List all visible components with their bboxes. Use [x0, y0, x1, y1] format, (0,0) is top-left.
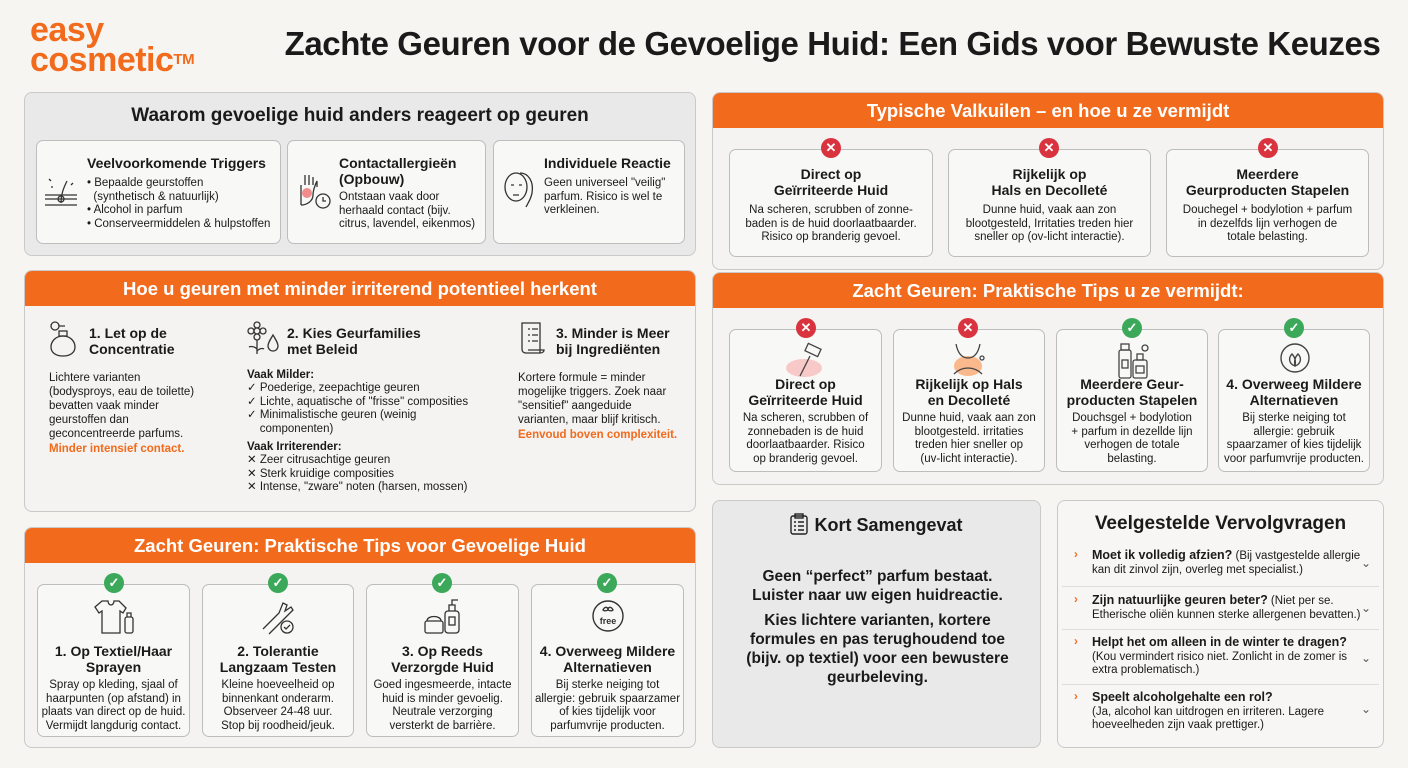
card 1: doorlaatbaarder. Risico	[746, 439, 865, 451]
panel: pitfalls: ✕	[1263, 140, 1273, 155]
faq 2: ⌄	[1361, 601, 1371, 615]
panel: pitfalls	[712, 92, 1384, 270]
faq 3	[1074, 635, 1371, 676]
card 2: en Decolleté	[928, 392, 1010, 408]
card 3: huid is minder gevoelig.	[382, 692, 503, 704]
panel: recognize scents: Concentratie	[89, 341, 175, 357]
card: individual reaction: parfum. Risico is wel te	[544, 190, 662, 202]
panel: recognize scents: ✕ Zeer citrusachtige geuren	[247, 454, 390, 466]
card: individual reaction	[493, 140, 685, 244]
faq 2: ›	[1074, 594, 1078, 606]
faq 4: ›	[1074, 691, 1078, 703]
check badges: ✓	[109, 575, 119, 590]
panel: recognize scents: mogelijke triggers. Zoek naar	[518, 386, 666, 398]
card: triggers	[36, 140, 281, 244]
card 1: 1. Op Textiel/Haar	[55, 643, 172, 659]
card 2: Rijkelijk op Hals	[915, 376, 1023, 392]
card 3: Neutrale verzorging	[392, 706, 493, 718]
panel: recognize scents: Vaak Irriterender:	[247, 441, 342, 453]
panel: practical tips right: ✓	[1127, 320, 1137, 335]
card 1: zonnebaden is de huid	[748, 426, 863, 438]
card 4: spaarzamer of kies tijdelijk	[1227, 439, 1361, 451]
card 2: Hals en Decolleté	[992, 182, 1107, 198]
faq 2: Zijn natuurlijke geuren beter? (Niet per se.	[1092, 593, 1334, 607]
card 2	[202, 584, 354, 737]
card: triggers: (synthetisch & natuurlijk)	[93, 190, 219, 202]
column 2	[247, 321, 468, 493]
card 1: Spray op kleding, sjaal of	[49, 679, 178, 691]
card 3: Meerdere	[1236, 166, 1299, 182]
panel: recognize scents: bevatten vaak minder	[49, 400, 159, 412]
heading: Veelgestelde Vervolgvragen	[1095, 513, 1346, 534]
panel: recognize scents: Lichtere varianten	[49, 372, 140, 384]
panel: practical tips left: ✓	[602, 575, 612, 590]
panel: recognize scents: 3. Minder is Meer	[556, 325, 670, 341]
faq 1: ⌄	[1361, 556, 1371, 570]
card 3	[1056, 329, 1208, 472]
faq 4: hoeveelheden zijn vaak prettiger.)	[1092, 719, 1264, 731]
icon: hand clock	[300, 175, 331, 209]
card 3: + parfum in dezellde lijn	[1071, 426, 1193, 438]
card 2: binnenkant onderarm.	[222, 692, 334, 704]
panel: practical tips right: ✓	[1289, 320, 1299, 335]
badges	[796, 318, 816, 338]
faq 4	[1074, 690, 1371, 731]
panel: recognize scents: ✕ Intense, "zware" noten (harsen, mossen)	[247, 481, 467, 493]
card 1: Na scheren, scrubben of	[743, 412, 868, 424]
icon: free badge	[592, 600, 624, 632]
panel: pitfalls: ✕	[1044, 140, 1054, 155]
x badges	[821, 138, 841, 158]
card 4: of kies tijdelijk voor	[559, 706, 656, 718]
faq 3: extra problematisch.)	[1092, 664, 1199, 676]
icon: cream pump	[424, 599, 460, 634]
panel: recognize scents: 1. Let op de	[89, 325, 167, 341]
card: triggers: Veelvoorkomende Triggers	[87, 155, 266, 171]
card 3	[366, 584, 519, 737]
card 3: verhogen de totale	[1084, 439, 1180, 451]
icon: skin hair	[45, 178, 77, 206]
card 1: Risico op branderig gevoel.	[761, 231, 901, 243]
card 3: versterkt de barrière.	[389, 720, 496, 732]
panel: why sensitive skin reacts	[24, 92, 696, 256]
card 2: Dunne huid, vaak aan zon	[902, 412, 1036, 424]
panel: practical tips right: ✕	[963, 320, 973, 335]
faq 1: kan dit zinvol zijn, overleg met specialist.)	[1092, 564, 1303, 576]
card: contact allergies: (Opbouw)	[339, 171, 404, 187]
card 3	[1166, 149, 1369, 257]
heading: Hoe u geuren met minder irriterend potentieel herkent	[123, 278, 597, 299]
column 3	[518, 322, 677, 441]
panel: recognize scents: bij Ingrediënten	[556, 341, 660, 357]
heading: Zacht Geuren: Praktische Tips voor Gevoelige Huid	[134, 535, 586, 556]
card 4	[531, 584, 684, 737]
card 2: treden hier sneller op	[915, 439, 1023, 451]
icon: free badge: free	[600, 616, 616, 626]
card 3: totale belasting.	[1227, 231, 1308, 243]
card 3: Douchegel + bodylotion + parfum	[1183, 204, 1352, 216]
card: contact allergies: citrus, lavendel, eikenmos)	[339, 218, 475, 230]
faq 3: (Kou vermindert risico niet. Zonlicht in de zomer is	[1092, 650, 1347, 662]
panel: summary	[712, 500, 1041, 748]
icon: neck	[954, 344, 985, 376]
card 2: Kleine hoeveelheid op	[221, 679, 335, 691]
panel: recognize scents: Eenvoud boven complexiteit.	[518, 429, 677, 441]
icon: shirt spray	[94, 600, 134, 634]
card 4: allergie: gebruik spaarzamer	[535, 692, 680, 704]
column 1	[49, 321, 194, 455]
card 1	[729, 149, 933, 257]
card 1: haarpunten (op afstand) in	[46, 692, 181, 704]
panel: recognize scents: ✓ Minimalistische geuren (weinig	[247, 409, 416, 421]
icon: perfume	[50, 321, 76, 357]
card 4: 4. Overweeg Mildere	[1226, 376, 1362, 392]
faq 1	[1074, 548, 1371, 576]
icon: arm check	[262, 602, 294, 634]
panel: recognize scents: varianten, maar blijf kritisch.	[518, 414, 661, 426]
x badges: ✕	[826, 140, 836, 155]
card 2: Dunne huid, vaak aan zon	[983, 204, 1116, 216]
panel: recognize scents: ✓ Poederige, zeepachtige geuren	[247, 382, 420, 394]
card 2: blootgesteld. irritaties	[915, 426, 1023, 438]
card 3: Meerdere Geur-	[1080, 376, 1184, 392]
icon: bottles	[1118, 343, 1149, 379]
card 4: parfumvrije producten.	[550, 720, 665, 732]
card 3: in dezelfds lijn verhogen de	[1198, 218, 1337, 230]
card 3: Douchsgel + bodylotion	[1072, 412, 1192, 424]
card 4: Alternatieven	[563, 659, 652, 675]
faq 3: Helpt het om alleen in de winter te dragen?	[1092, 635, 1347, 649]
card 4: Alternatieven	[1250, 392, 1338, 408]
panel: recognize scents: ✕ Sterk kruidige composities	[247, 468, 394, 480]
card 1: op branderig gevoel.	[753, 452, 858, 464]
heading	[25, 528, 695, 563]
card 2: sneller op (ov-licht interactie).	[974, 231, 1125, 243]
card 4: 4. Overweeg Mildere	[540, 643, 675, 659]
card 1: Direct op	[775, 376, 836, 392]
panel: recognize scents: componenten)	[260, 423, 333, 435]
panel: recognize scents: met Beleid	[287, 341, 358, 357]
card 1	[37, 584, 190, 737]
card 1: baden is de huid doorlaatbaarder.	[745, 218, 917, 230]
faq 4: Speelt alcoholgehalte een rol?	[1092, 690, 1273, 704]
card 3: 3. Op Reeds	[402, 643, 483, 659]
faq 3: ⌄	[1361, 651, 1371, 665]
panel: recognize scents: Kortere formule = minder	[518, 372, 646, 384]
panel: recognize scents	[24, 270, 696, 512]
panel: recognize scents: geconcentreerde parfums.	[49, 428, 183, 440]
card 2: Rijkelijk op	[1013, 166, 1086, 182]
heading: Waarom gevoelige huid anders reageert op geuren	[131, 105, 589, 126]
heading	[713, 93, 1383, 128]
panel: practical tips right	[712, 272, 1384, 485]
card: triggers: • Conserveermiddelen & hulpstoffen	[87, 218, 270, 230]
card 3: belasting.	[1107, 452, 1157, 464]
faq 1: Moet ik volledig afzien? (Bij vastgestelde allergie	[1092, 548, 1360, 562]
icon: flower drop	[247, 321, 279, 354]
faq 2	[1074, 593, 1371, 620]
summary text: Luister naar uw eigen huidreactie. Kies lichtere varianten, kortere formules en pas terughoudend toe (bijv. op textiel) voor een bewustere geurbeleving.	[746, 587, 1009, 686]
heading	[25, 271, 695, 306]
icon: scroll list	[521, 322, 545, 354]
faq 2: Etherische oliën kunnen sterke allergenen bevatten.)	[1092, 608, 1361, 620]
faq 4: ⌄	[1361, 702, 1371, 716]
panel: recognize scents: 2. Kies Geurfamilies	[287, 325, 421, 341]
icon: face	[504, 172, 534, 208]
card 2: Observeer 24-48 uur.	[224, 706, 332, 718]
card 2: Stop bij roodheid/jeuk.	[221, 720, 335, 732]
card 4	[1218, 329, 1370, 472]
panel: recognize scents: (bodysproys, eau de toilette)	[49, 386, 194, 398]
card 4: voor parfumvrije producten.	[1224, 452, 1364, 464]
panel: recognize scents: Minder intensief contact.	[49, 443, 184, 455]
card 3: Verzorgde Huid	[391, 659, 494, 675]
card 1: Vermijdt langdurig contact.	[46, 720, 181, 732]
logo	[30, 11, 194, 79]
card 1: Direct op	[801, 166, 861, 182]
card 1: Na scheren, scrubben of zonne-	[749, 204, 913, 216]
card 4: allergie: gebruik	[1253, 426, 1335, 438]
panel: recognize scents: "sensitief" aangeduide	[518, 400, 632, 412]
badges: ✕	[801, 320, 811, 335]
card 4: Bij sterke neiging tot	[556, 679, 659, 691]
panel: recognize scents: Vaak Milder:	[247, 369, 314, 381]
card 2: (uv-licht interactie).	[920, 452, 1018, 464]
icon: leaf cycle	[1280, 343, 1310, 373]
card 1: Sprayen	[86, 659, 141, 675]
card: individual reaction: Geen universeel "veilig"	[544, 177, 665, 189]
card 1: plaats van direct op de huid.	[42, 706, 185, 718]
card 2: blootgesteld, Irritaties treden hier	[966, 218, 1133, 230]
faq 1: ›	[1074, 549, 1078, 561]
title: Zachte Geuren voor de Gevoelige Huid: Een Gids voor Bewuste Keuzes	[285, 25, 1380, 62]
faq 4: (Ja, alcohol kan uitdrogen en irriteren. Lagere	[1092, 706, 1324, 718]
heading	[713, 273, 1383, 308]
card 2	[948, 149, 1151, 257]
card: contact allergies: herhaald contact (bijv.	[339, 204, 451, 216]
card: individual reaction: Individuele Reactie	[544, 155, 671, 171]
logo: cosmeticTM	[30, 41, 194, 79]
panel: practical tips left: ✓	[273, 575, 283, 590]
panel: practical tips left: ✓	[437, 575, 447, 590]
card 1	[729, 329, 882, 472]
card 3: Goed ingesmeerde, intacte	[373, 679, 512, 691]
card: individual reaction: verkleinen.	[544, 204, 600, 216]
panel: recognize scents: ✓ Lichte, aquatische of "frisse" composities	[247, 396, 468, 408]
panel: FAQ	[1057, 500, 1384, 748]
heading: Zacht Geuren: Praktische Tips u ze vermijdt:	[852, 280, 1244, 301]
panel: recognize scents: geurstoffen dan	[49, 414, 129, 426]
icon: razor	[786, 342, 822, 377]
card 3: Geurproducten Stapelen	[1186, 182, 1349, 198]
card 2	[893, 329, 1045, 472]
heading: Typische Valkuilen – en hoe u ze vermijdt	[867, 100, 1229, 121]
card: triggers: • Alcohol in parfum	[87, 204, 182, 216]
check badges	[104, 573, 124, 593]
heading with clipboard icon: Kort Samengevat	[814, 515, 963, 535]
summary text: Geen “perfect” parfum bestaat.	[762, 568, 992, 585]
panel: practical tips left	[24, 527, 696, 748]
card 1: Geïrriteerde Huid	[748, 392, 863, 408]
card 4: Bij sterke neiging tot	[1242, 412, 1346, 424]
card: triggers: • Bepaalde geurstoffen	[87, 177, 203, 189]
card 2: 2. Tolerantie	[237, 643, 319, 659]
card: contact allergies: Contactallergieën	[339, 155, 456, 171]
card: contact allergies: Ontstaan vaak door	[339, 191, 439, 203]
card: contact allergies	[287, 140, 486, 244]
card 1: Geïrriteerde Huid	[774, 182, 888, 198]
logo: easy	[30, 11, 104, 49]
card 2: Langzaam Testen	[220, 659, 336, 675]
faq 3: ›	[1074, 636, 1078, 648]
card 3: producten Stapelen	[1067, 392, 1197, 408]
